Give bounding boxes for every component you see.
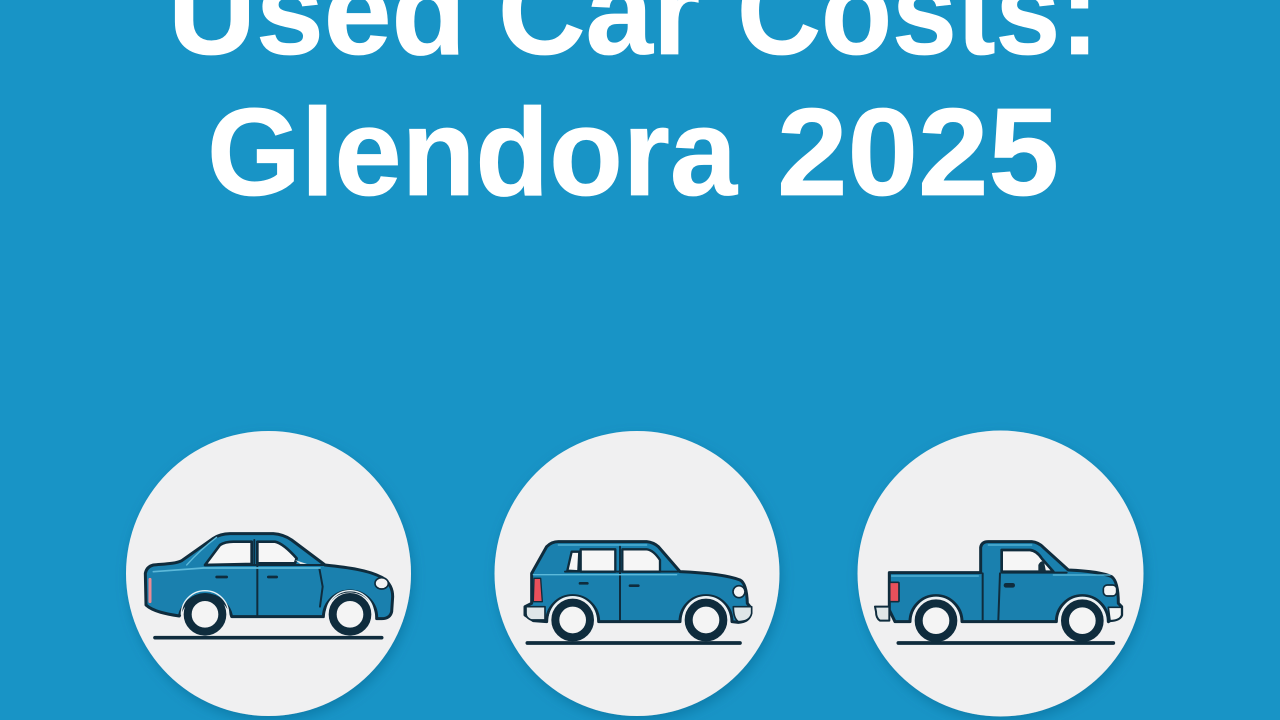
title: Glendora <box>207 84 738 222</box>
title: 2025 <box>777 84 1059 222</box>
panel: SUV <box>494 431 780 716</box>
panel: sedan <box>126 431 411 716</box>
panel: pickup truck <box>858 430 1144 716</box>
icon: SUV <box>525 542 752 643</box>
icon: pickup truck <box>875 542 1122 643</box>
title <box>168 0 1099 222</box>
icon: sedan car <box>145 534 393 638</box>
